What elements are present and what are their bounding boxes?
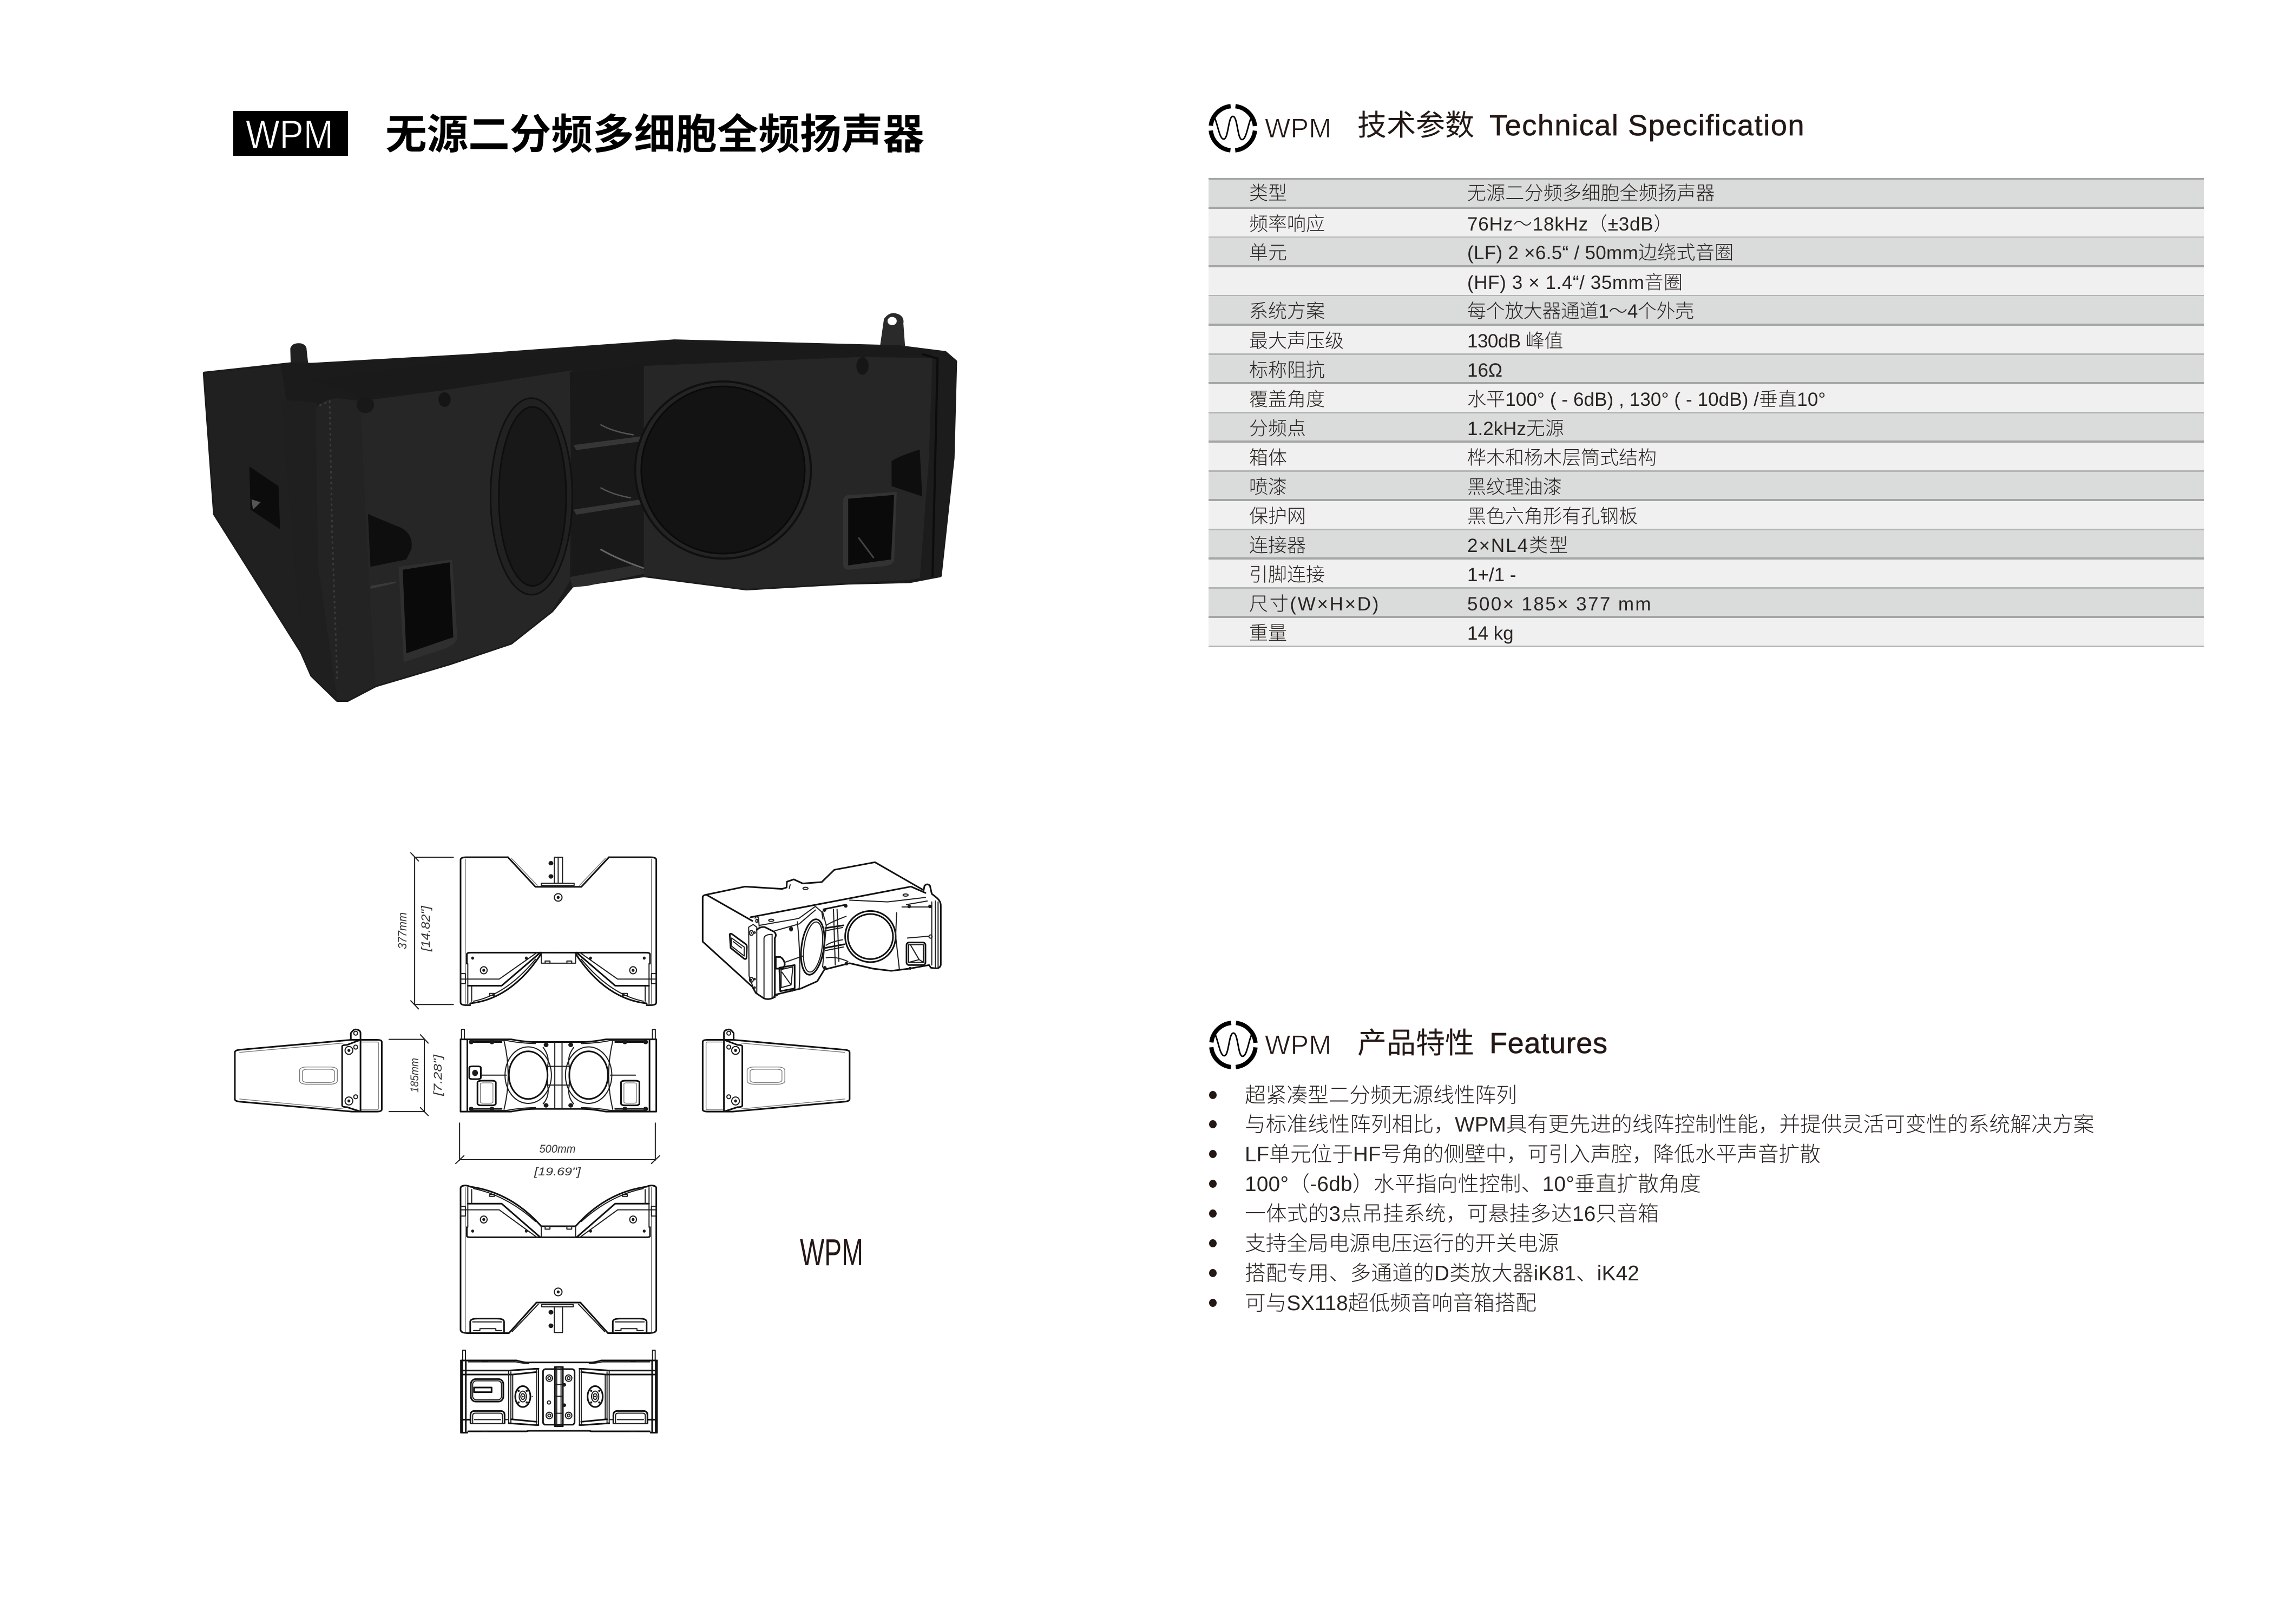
side handle bbox=[249, 466, 280, 529]
dimension: 377mm: [14.82"] bbox=[419, 905, 432, 952]
row: pinout: 引脚连接 bbox=[1249, 564, 1325, 586]
feature 1: 超紧凑型二分频无源线性阵列 bbox=[1245, 1084, 1517, 1107]
throat between woofers bbox=[570, 365, 646, 586]
row: impedance: 16Ω bbox=[1467, 360, 1502, 381]
row: grille bbox=[1209, 501, 2204, 530]
side view right drawing bbox=[702, 1029, 850, 1112]
row: max SPL: 130dB 峰值 bbox=[1467, 331, 1563, 352]
logo wordmark: WPM: WPM bbox=[1265, 113, 1331, 143]
front left edge bbox=[316, 398, 376, 700]
row: system: 系统方案 bbox=[1249, 301, 1325, 322]
row: crossover: 1.2kHz无源 bbox=[1467, 418, 1564, 439]
rigging tab right bbox=[880, 313, 905, 351]
row: type: 类型 bbox=[1249, 183, 1287, 204]
right port bbox=[891, 450, 922, 496]
front view drawing bbox=[461, 1029, 656, 1112]
logo: features heading bbox=[1211, 1023, 1256, 1067]
bullet bbox=[1209, 1239, 1217, 1247]
dimension: 377mm: 377mm bbox=[396, 912, 409, 949]
right horn face bbox=[644, 357, 935, 589]
row: type bbox=[1209, 178, 2204, 209]
logo: technical specification heading bbox=[1211, 106, 1255, 150]
cabinet side face bbox=[205, 366, 319, 678]
row: driver LF: (LF) 2 ×6.5“ / 50mm边绕式音圈 bbox=[1467, 242, 1734, 264]
dimension: 500mm: [19.69"] bbox=[534, 1166, 581, 1178]
row: connector: 连接器 bbox=[1249, 535, 1306, 556]
row: cabinet: 箱体 bbox=[1249, 448, 1287, 469]
row: grille: 黑色六角形有孔钢板 bbox=[1467, 506, 1638, 527]
right woofer bbox=[635, 382, 811, 558]
row: pinout bbox=[1209, 560, 2204, 589]
row: connector bbox=[1209, 530, 2204, 560]
isometric view drawing bbox=[702, 862, 941, 999]
row: impedance bbox=[1209, 355, 2204, 384]
row: max SPL: 最大声压级 bbox=[1249, 331, 1344, 352]
bullet bbox=[1209, 1150, 1217, 1158]
row: coverage: 水平100° ( - 6dB) , 130° ( - 10dB) /垂直10° bbox=[1467, 389, 1826, 410]
dimension: 500mm: 500mm bbox=[539, 1143, 576, 1155]
row: cabinet bbox=[1209, 443, 2204, 472]
dimension: 185mm: 185mm bbox=[409, 1058, 421, 1093]
row: finish: 黑纹理油漆 bbox=[1467, 477, 1562, 498]
feature 3: LF单元位于HF号角的侧壁中，可引入声腔，降低水平声音扩散 bbox=[1245, 1143, 1821, 1166]
feature list bbox=[1209, 1084, 2094, 1315]
dimension: 377mm bbox=[396, 853, 454, 1009]
row: driver HF bbox=[1209, 267, 2204, 297]
bullet bbox=[1209, 1209, 1217, 1218]
model label: WPM: WPM bbox=[800, 1231, 863, 1273]
row: coverage bbox=[1209, 384, 2204, 413]
top view drawing bbox=[461, 857, 656, 1005]
side view left drawing bbox=[235, 1029, 382, 1112]
cabinet silhouette bbox=[205, 341, 955, 700]
dimension: 185mm bbox=[389, 1035, 444, 1115]
feature 8: 可与SX118超低频音响音箱搭配 bbox=[1245, 1292, 1537, 1315]
logo wordmark: WPM: WPM bbox=[1265, 1030, 1331, 1060]
row: weight: 重量 bbox=[1249, 623, 1287, 644]
bullet bbox=[1209, 1269, 1217, 1277]
row: driver LF: 单元 bbox=[1249, 242, 1287, 264]
row: pinout: 1+/1 - bbox=[1467, 564, 1516, 586]
heading: features: 产品特性 Features bbox=[1357, 1027, 1608, 1060]
cabinet top strip bbox=[312, 343, 935, 397]
row: coverage: 覆盖角度 bbox=[1249, 389, 1325, 410]
bottom view drawing bbox=[461, 1186, 656, 1333]
row: frequency response: 76Hz～18kHz（±3dB） bbox=[1467, 214, 1673, 235]
dimension: 185mm: [7.28"] bbox=[432, 1054, 444, 1096]
row: type: 无源二分频多细胞全频扬声器 bbox=[1467, 183, 1715, 204]
bullet bbox=[1209, 1299, 1217, 1307]
row: dimensions bbox=[1209, 589, 2204, 618]
left port bbox=[368, 514, 412, 567]
title: product name: 无源二分频多细胞全频扬声器 bbox=[385, 112, 924, 158]
dimension: 500mm bbox=[456, 1123, 660, 1178]
spec table bbox=[1209, 178, 2204, 647]
row: driver LF bbox=[1209, 238, 2204, 267]
row: dimensions: 500× 185× 377 mm bbox=[1467, 594, 1652, 615]
row: frequency response bbox=[1209, 209, 2204, 238]
feature 6: 支持全局电源电压运行的开关电源 bbox=[1245, 1232, 1559, 1255]
title badge: WPM: WPM bbox=[246, 112, 333, 156]
feature 2: 与标准线性阵列相比，WPM具有更先进的线阵控制性能，并提供灵活可变性的系统解决方案 bbox=[1245, 1113, 2094, 1136]
row: crossover: 分频点 bbox=[1249, 418, 1306, 439]
row: cabinet: 桦木和杨木层筒式结构 bbox=[1467, 448, 1657, 469]
row: system: 每个放大器通道1～4个外壳 bbox=[1467, 301, 1694, 322]
bullet bbox=[1209, 1180, 1217, 1188]
feature 5: 一体式的3点吊挂系统，可悬挂多达16只音箱 bbox=[1245, 1202, 1659, 1226]
row: impedance: 标称阻抗 bbox=[1249, 360, 1325, 381]
row: grille: 保护网 bbox=[1249, 506, 1306, 527]
row: crossover bbox=[1209, 413, 2204, 443]
feature 7: 搭配专用、多通道的D类放大器iK81、iK42 bbox=[1245, 1262, 1639, 1285]
left horn face bbox=[360, 370, 572, 686]
heading: technical specification: 技术参数 Technical Specification bbox=[1357, 109, 1805, 142]
rigging tab left bbox=[290, 343, 311, 388]
row: max SPL bbox=[1209, 326, 2204, 355]
row: connector: 2×NL4类型 bbox=[1467, 535, 1569, 556]
row: weight bbox=[1209, 618, 2204, 647]
bullet bbox=[1209, 1091, 1217, 1099]
row: driver HF: (HF) 3 × 1.4“/ 35mm音圈 bbox=[1467, 272, 1683, 293]
row: frequency response: 频率响应 bbox=[1249, 214, 1325, 235]
row: dimensions: 尺寸(W×H×D) bbox=[1249, 594, 1380, 615]
row: finish bbox=[1209, 472, 2204, 501]
row: weight: 14 kg bbox=[1467, 623, 1514, 644]
row: system bbox=[1209, 296, 2204, 326]
rear view drawing bbox=[461, 1350, 657, 1432]
feature 4: 100°（-6db）水平指向性控制、10°垂直扩散角度 bbox=[1245, 1173, 1701, 1196]
left woofer bbox=[490, 398, 572, 595]
row: finish: 喷漆 bbox=[1249, 477, 1287, 498]
bullet bbox=[1209, 1120, 1217, 1128]
